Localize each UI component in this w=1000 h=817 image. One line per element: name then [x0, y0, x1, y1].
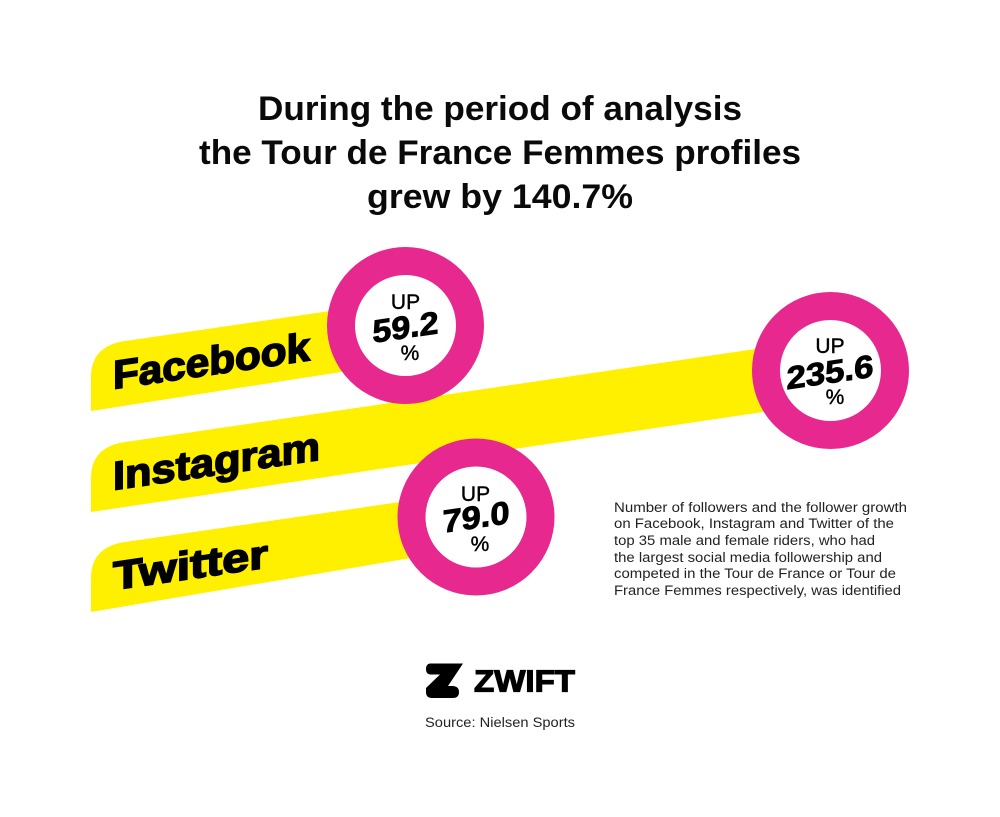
badge: Instagram up 235.6%: %	[826, 386, 844, 409]
badge: Twitter up 79.0%: UP	[461, 483, 490, 506]
badge: Facebook up 59.2%: UP	[391, 291, 420, 314]
methodology note: on Facebook, Instagram and Twitter of the	[614, 516, 894, 531]
badge: Twitter up 79.0%: %	[471, 533, 489, 556]
logo: Zwift	[426, 664, 575, 698]
badge: Facebook up 59.2%: 59.2	[372, 304, 438, 350]
title	[199, 90, 801, 216]
methodology note: the largest social media followership and	[614, 550, 882, 565]
band: Instagram	[91, 338, 830, 512]
methodology note: top 35 male and female riders, who had	[614, 533, 875, 548]
label: Instagram: Instagram	[113, 424, 320, 499]
badge: Instagram up 235.6%: 235.6	[786, 348, 874, 396]
band: Twitter	[91, 491, 476, 612]
badge: Twitter up 79.0%: 79.0	[442, 494, 510, 540]
band: Facebook	[91, 300, 405, 411]
title: grew by 140.7%	[367, 178, 633, 216]
badge: Instagram up 235.6%	[766, 306, 895, 435]
source: Source: Nielsen Sports	[425, 714, 575, 730]
methodology note: France Femmes respectively, was identified	[614, 583, 901, 598]
wordmark: ZWIFT	[474, 664, 575, 698]
icon: Zwift Z	[426, 664, 463, 698]
badge: Instagram up 235.6%: UP	[815, 335, 845, 358]
methodology note	[614, 500, 907, 598]
methodology note: Number of followers and the follower growth	[614, 500, 907, 515]
methodology note: competed in the Tour de France or Tour de	[614, 566, 896, 581]
label: Twitter: Twitter	[113, 532, 268, 599]
title: During the period of analysis	[258, 90, 742, 128]
badge: Facebook up 59.2%	[341, 261, 470, 390]
title: the Tour de France Femmes profiles	[199, 134, 801, 172]
badge: Facebook up 59.2%: %	[401, 342, 419, 365]
badge: Twitter up 79.0%	[412, 452, 540, 582]
label: Facebook: Facebook	[113, 324, 311, 398]
